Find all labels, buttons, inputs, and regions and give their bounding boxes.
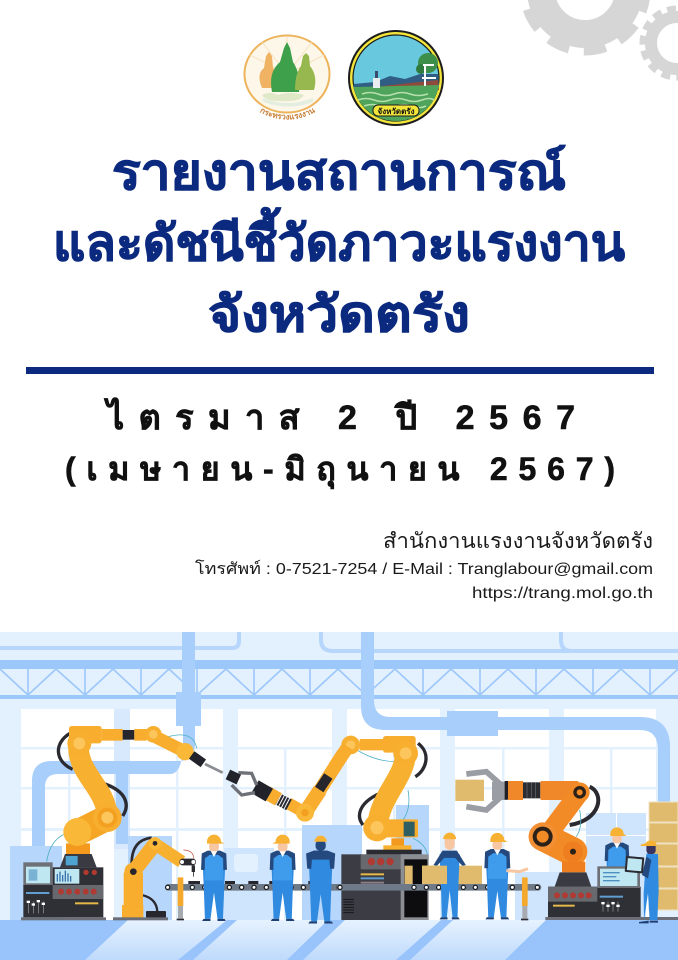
illustration: factory (0, 632, 678, 960)
factory wall (0, 632, 678, 922)
logo: Trang province (349, 31, 443, 125)
phone and email: โทรศัพท์ : 0-7521-7254 / E-Mail : Tranglabour@gmail.com (195, 559, 653, 578)
right half assembly line (335, 736, 678, 923)
logo: Trang province: จังหวัดตรัง (378, 107, 415, 116)
icon: large gear (525, 0, 645, 50)
worker 1 (201, 835, 227, 921)
worker 7 with tablet (625, 840, 659, 923)
subtitle (65, 397, 615, 490)
columns and process pipes (32, 632, 670, 850)
ceiling pipes (0, 632, 678, 651)
conveyor left (165, 877, 342, 920)
floor (0, 920, 678, 960)
worker 6 (605, 827, 629, 910)
contact block (195, 530, 653, 602)
conveyor right (336, 866, 541, 920)
gripper arm (226, 753, 343, 822)
robot arm 2 (335, 736, 427, 854)
title line 3: จังหวัดตรัง (208, 288, 470, 342)
logo: ministry of labour: กระทรวงแรงงาน (260, 108, 316, 120)
robot arm 3 (466, 772, 598, 887)
windows (21, 709, 656, 920)
office name: สำนักงานแรงงานจังหวัดตรัง (383, 530, 653, 553)
logo: ministry of labour (244, 34, 330, 120)
title line 1: รายงานสถานการณ์ (112, 145, 566, 200)
left half assembly line (21, 726, 343, 924)
worker 5 (484, 833, 528, 919)
background machines (10, 805, 646, 920)
box on conveyor front (423, 866, 447, 884)
control console right (545, 866, 678, 920)
roof truss (0, 660, 678, 699)
icon: small gear (643, 9, 678, 77)
subtitle months: (เมษายน-มิถุนายน 2567) (65, 451, 615, 490)
control console left (21, 854, 106, 920)
stacked boxes (649, 802, 678, 910)
box machine (341, 854, 429, 920)
title (53, 145, 626, 342)
box in gripper (455, 780, 484, 801)
robot arm 1 (47, 726, 223, 862)
small robot arm (113, 837, 196, 920)
title rule (26, 367, 654, 374)
website: https://trang.mol.go.th (472, 585, 653, 602)
worker 4 (433, 833, 466, 919)
worker 3 (306, 836, 335, 924)
worker 2 (270, 835, 296, 921)
title line 2: และดัชนีชี้วัดภาวะแรงงาน (53, 207, 626, 271)
subtitle quarter: ไตรมาส 2 ปี 2567 (104, 397, 575, 437)
